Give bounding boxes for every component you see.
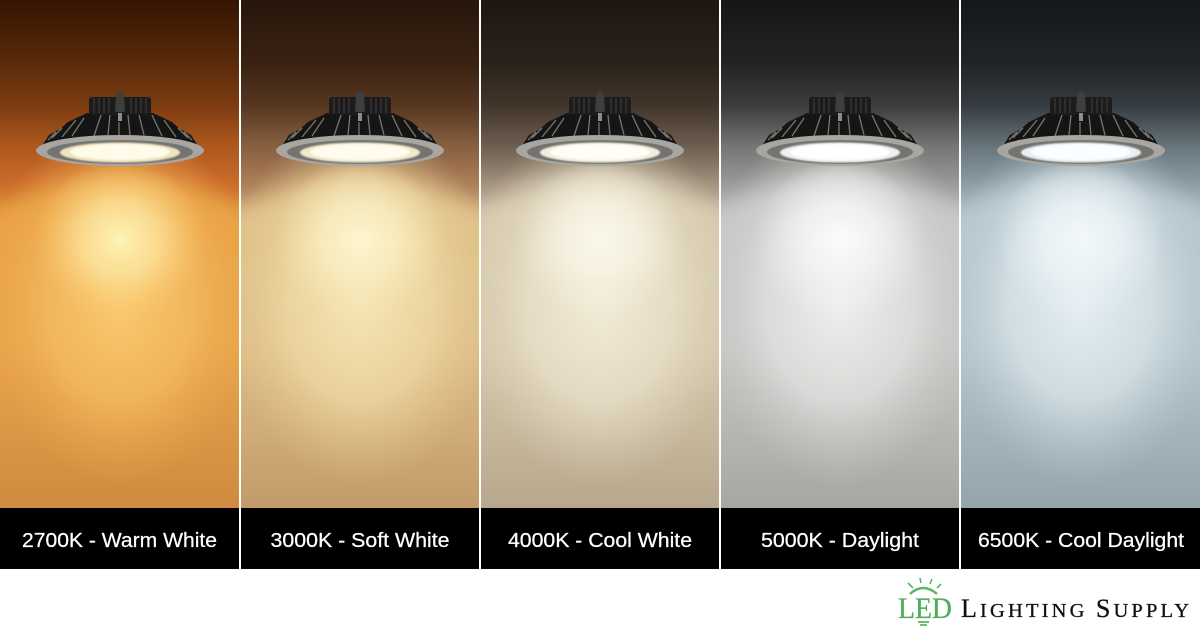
- logo word: LED: LED: [898, 592, 952, 625]
- icon: ceiling lamp: [516, 91, 684, 166]
- icon: ceiling lamp: [36, 91, 204, 166]
- icon: light bulb rays: [908, 578, 941, 625]
- panel: 4000K cool white: [481, 0, 719, 508]
- label: 6500K - Cool Daylight: [961, 508, 1200, 569]
- icon: ceiling lamp: [756, 91, 924, 166]
- light pool: [721, 158, 959, 470]
- light pool: [0, 158, 239, 508]
- label: 5000K - Daylight: [721, 508, 959, 569]
- logo word: Lighting Supply: LIGHTING SUPPLY: [961, 594, 1189, 623]
- label: 3000K - Soft White: 3000K - Soft White: [270, 530, 450, 552]
- light pool: [241, 158, 479, 508]
- panel: 5000K daylight: [721, 0, 959, 508]
- label: 5000K - Daylight: 5000K - Daylight: [761, 530, 919, 552]
- logo: LED Lighting Supply: [898, 578, 1189, 625]
- panel: 6500K cool daylight: [961, 0, 1200, 508]
- panel: 2700K warm white: [0, 0, 239, 508]
- label: 2700K - Warm White: 2700K - Warm White: [22, 530, 217, 552]
- light pool: [961, 158, 1200, 464]
- label: 4000K - Cool White: 4000K - Cool White: [508, 530, 692, 552]
- icon: ceiling lamp: [997, 91, 1165, 166]
- label: 6500K - Cool Daylight: 6500K - Cool Daylight: [978, 530, 1184, 552]
- panel: 3000K soft white: [241, 0, 479, 508]
- label: 2700K - Warm White: [0, 508, 239, 569]
- light pool: [481, 158, 719, 488]
- icon: ceiling lamp: [276, 91, 444, 166]
- label: 4000K - Cool White: [481, 508, 719, 569]
- label: 3000K - Soft White: [241, 508, 479, 569]
